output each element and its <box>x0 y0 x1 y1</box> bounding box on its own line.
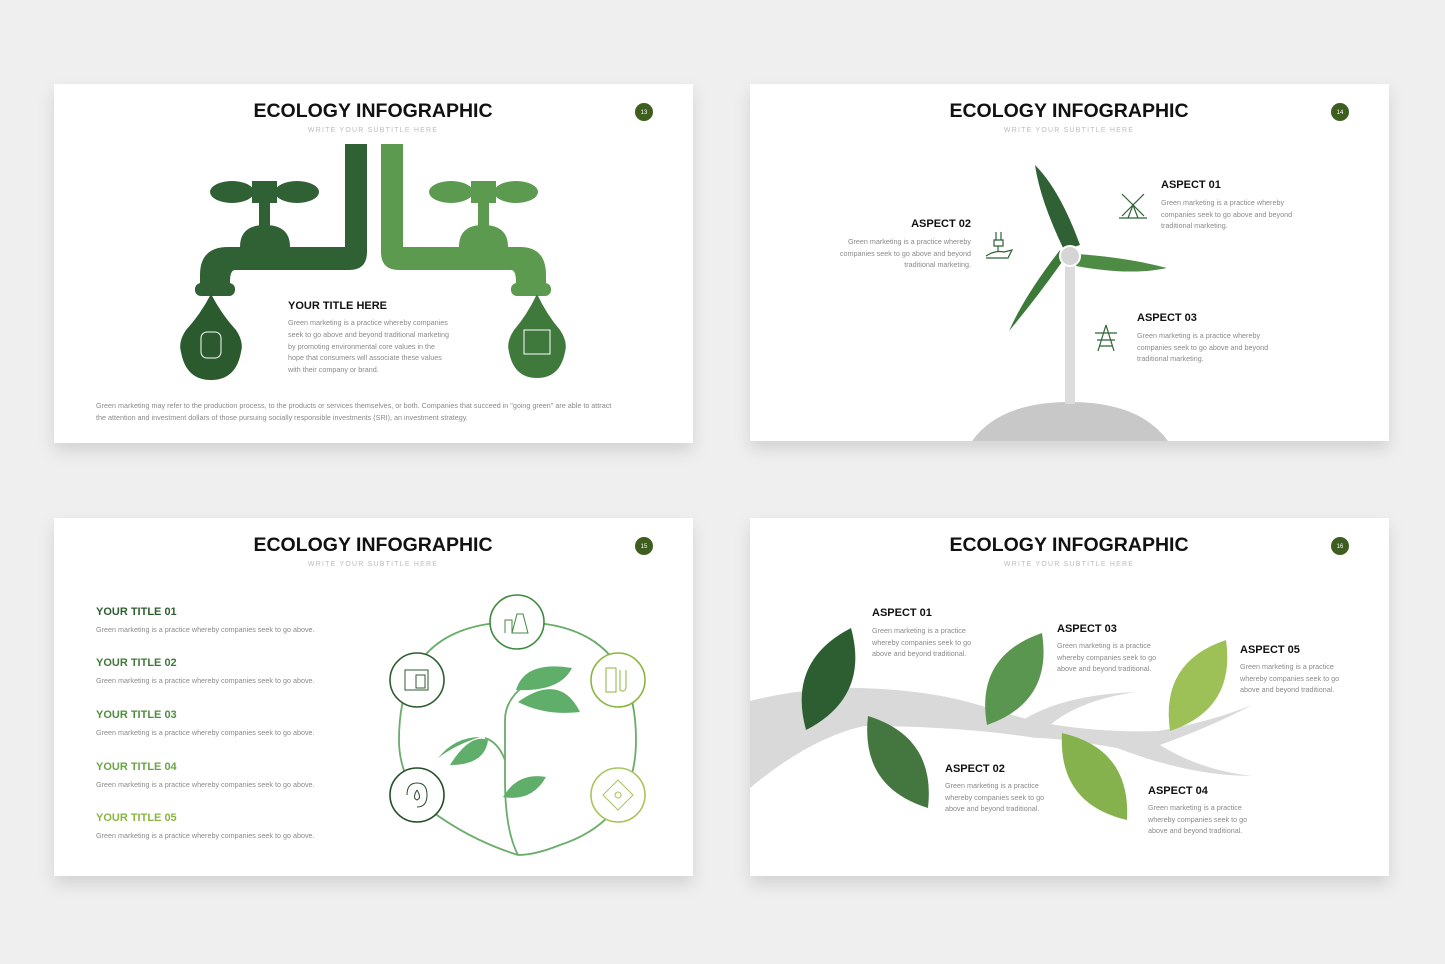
title: ECOLOGY INFOGRAPHIC <box>253 534 493 556</box>
aspect 05 <box>1239 644 1339 694</box>
aspect 01: ASPECT 01 <box>1161 179 1221 191</box>
aspect 03: traditional marketing. <box>1137 354 1204 363</box>
aspect 01 <box>871 607 971 658</box>
aspect 01: companies seek to go above and beyond <box>1161 210 1292 219</box>
aspect 02: traditional marketing. <box>904 260 971 269</box>
aspect 03: companies seek to go above and beyond <box>1137 343 1268 352</box>
text block <box>287 300 449 374</box>
text block: with their company or brand. <box>287 365 379 374</box>
aspect 04: whereby companies seek to go <box>1147 815 1247 824</box>
panel: slide 16 branch <box>750 518 1389 876</box>
aspect 04 <box>1147 785 1247 835</box>
aspect 02: Green marketing is a practice whereby <box>848 237 971 246</box>
badge: 14 <box>1337 110 1344 116</box>
badge: 15 <box>641 544 648 550</box>
text block: seek to go above and beyond traditional marketing <box>288 330 449 339</box>
badge: 13 <box>641 110 648 116</box>
aspect 03: ASPECT 03 <box>1137 312 1197 324</box>
aspect 02: ASPECT 02 <box>945 763 1005 775</box>
list: YOUR TITLE 03 <box>96 709 177 721</box>
aspect 05: whereby companies seek to go <box>1239 674 1339 683</box>
aspect 03 <box>1056 623 1156 673</box>
aspect 01: above and beyond traditional. <box>872 649 966 658</box>
aspect 02 <box>944 763 1044 813</box>
icon: light tap <box>381 144 551 296</box>
plant outline <box>399 622 636 855</box>
aspect 05: ASPECT 05 <box>1240 644 1300 656</box>
aspect 02: ASPECT 02 <box>911 218 971 230</box>
list: YOUR TITLE 02 <box>96 657 177 669</box>
aspect 03 <box>1137 312 1268 363</box>
badge <box>635 537 653 555</box>
aspect 01: Green marketing is a practice whereby <box>1161 198 1284 207</box>
aspect 03: whereby companies seek to go <box>1056 653 1156 662</box>
badge <box>635 103 653 121</box>
text block: hope that consumers will associate these values <box>288 353 442 362</box>
panel: slide 13 taps <box>54 84 693 443</box>
aspect 04: above and beyond traditional. <box>1148 826 1242 835</box>
subtitle: WRITE YOUR SUBTITLE HERE <box>1004 127 1134 134</box>
aspect 02: Green marketing is a practice <box>945 781 1039 790</box>
panel: slide 15 plant <box>54 518 693 876</box>
badge: 16 <box>1337 544 1344 550</box>
list: Green marketing is a practice whereby companies seek to go above. <box>96 728 315 737</box>
footer text <box>96 401 611 422</box>
icon: dark tap <box>195 144 367 296</box>
icon: windmill <box>1119 194 1147 218</box>
icon: dark drop <box>180 294 242 380</box>
aspect 01: Green marketing is a practice <box>872 626 966 635</box>
text block: by promoting environmental core values in the <box>288 342 435 351</box>
panel: slide 14 turbine <box>750 84 1389 441</box>
branch <box>750 688 1252 788</box>
leaves <box>802 628 1227 820</box>
subtitle: WRITE YOUR SUBTITLE HERE <box>308 127 438 134</box>
aspect 05: Green marketing is a practice <box>1240 662 1334 671</box>
list: Green marketing is a practice whereby companies seek to go above. <box>96 625 315 634</box>
aspect 01: ASPECT 01 <box>872 607 932 619</box>
subtitle: WRITE YOUR SUBTITLE HERE <box>1004 561 1134 568</box>
list: Green marketing is a practice whereby companies seek to go above. <box>96 780 315 789</box>
aspect 04: ASPECT 04 <box>1148 785 1209 797</box>
text block: Green marketing is a practice whereby companies <box>288 318 448 327</box>
icon: pylon <box>1095 325 1117 351</box>
list: Green marketing is a practice whereby companies seek to go above. <box>96 676 315 685</box>
list <box>96 606 315 840</box>
title: ECOLOGY INFOGRAPHIC <box>949 534 1189 556</box>
icon circles <box>390 595 645 822</box>
list: YOUR TITLE 01 <box>96 606 177 618</box>
leaves <box>438 666 580 798</box>
icon: light drop <box>508 294 566 378</box>
badge <box>1331 537 1349 555</box>
footer text: the attention and investment dollars of those pursuing socially responsible investments (SRI), an investment strategy. <box>96 413 468 422</box>
aspect 02: above and beyond traditional. <box>945 804 1039 813</box>
title: ECOLOGY INFOGRAPHIC <box>253 100 493 122</box>
aspect 03: Green marketing is a practice <box>1057 641 1151 650</box>
hill <box>972 402 1168 441</box>
subtitle: WRITE YOUR SUBTITLE HERE <box>308 561 438 568</box>
icon glyphs <box>405 614 633 810</box>
list: YOUR TITLE 05 <box>96 812 177 824</box>
aspect 02: companies seek to go above and beyond <box>840 249 971 258</box>
footer text: Green marketing may refer to the production process, to the products or services themselves, or both. Companies that succeed in "going green" are able to attract <box>96 401 611 410</box>
badge <box>1331 103 1349 121</box>
aspect 03: above and beyond traditional. <box>1057 664 1151 673</box>
text block: YOUR TITLE HERE <box>288 300 387 312</box>
aspect 05: above and beyond traditional. <box>1240 685 1334 694</box>
list: Green marketing is a practice whereby companies seek to go above. <box>96 831 315 840</box>
aspect 01 <box>1161 179 1292 230</box>
aspect 03: Green marketing is a practice whereby <box>1137 331 1260 340</box>
aspect 02: whereby companies seek to go <box>944 793 1044 802</box>
aspect 04: Green marketing is a practice <box>1148 803 1242 812</box>
aspect 01: whereby companies seek to go <box>871 638 971 647</box>
aspect 01: traditional marketing. <box>1161 221 1228 230</box>
aspect 03: ASPECT 03 <box>1057 623 1117 635</box>
icon: wind turbine <box>1009 165 1167 404</box>
aspect 02 <box>840 218 971 269</box>
icon: hand plug <box>986 232 1012 258</box>
list: YOUR TITLE 04 <box>96 761 178 773</box>
title: ECOLOGY INFOGRAPHIC <box>949 100 1189 122</box>
